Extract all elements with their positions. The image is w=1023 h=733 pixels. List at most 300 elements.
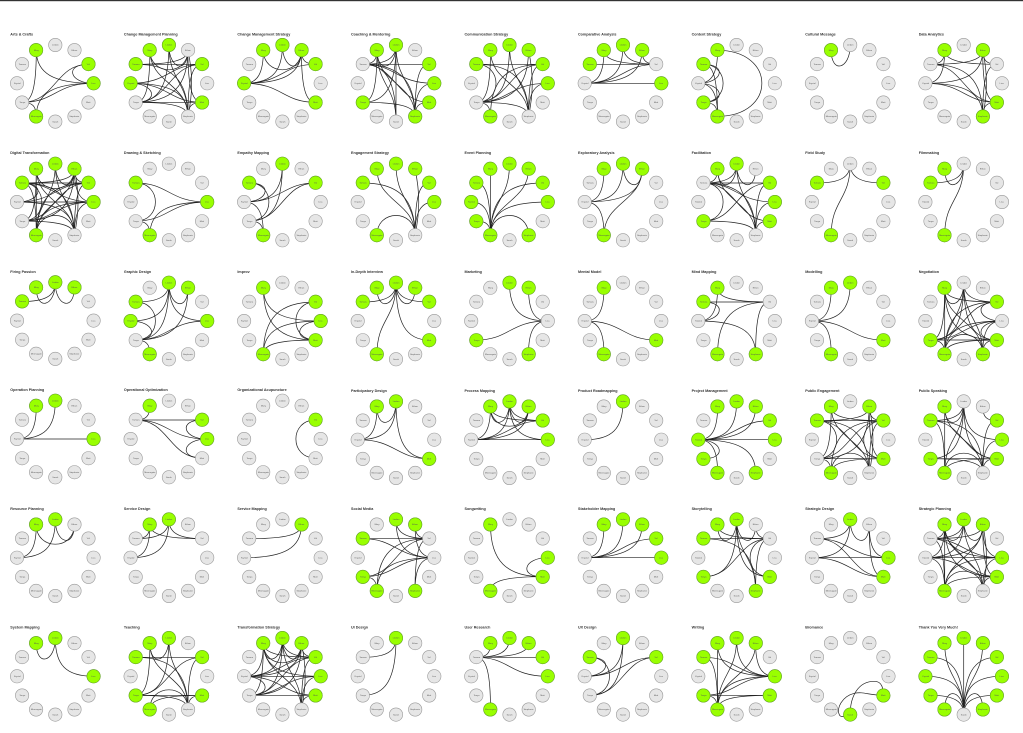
nodes: Lisa (318, 439, 323, 441)
nodes: Lindon (52, 519, 59, 521)
nodes: Tamara (473, 419, 481, 422)
nodes: Krystal (355, 82, 362, 85)
nodes: Stephanie (864, 590, 875, 593)
nodes: Tonya (814, 695, 821, 697)
nodes: Sarah (507, 713, 513, 716)
nodes: Tamara (814, 182, 822, 184)
nodes: Mary (147, 642, 153, 645)
nodes: Mary (375, 642, 380, 645)
nodes: Krystal (809, 201, 816, 204)
nodes: Krystal (922, 82, 930, 85)
panel: Engagement Strategy (351, 151, 441, 247)
edges (926, 520, 1002, 591)
nodes: Ethan (980, 286, 986, 290)
nodes (692, 395, 782, 485)
nodes: Ethan (299, 168, 305, 170)
nodes: Meenugate (31, 590, 43, 593)
nodes: Lisa (773, 557, 777, 559)
title: Participatory Design (351, 389, 388, 393)
nodes: Ethan (185, 404, 192, 408)
nodes: Lisa (1000, 676, 1004, 678)
nodes: Krystal (241, 320, 248, 323)
nodes: Lisa (545, 676, 550, 678)
nodes (692, 157, 782, 247)
nodes: Sarah (279, 595, 286, 598)
nodes: Meenugate (712, 353, 724, 356)
nodes: Lindon (506, 638, 514, 640)
panel: Transformation Strategy (237, 626, 327, 721)
nodes: Sarah (961, 358, 967, 361)
edges (931, 283, 1002, 354)
title: Service Design (124, 507, 151, 511)
nodes: Val (654, 420, 658, 422)
nodes: Lisa (432, 321, 437, 323)
nodes: Tamara (132, 537, 140, 540)
nodes: Sarah (279, 476, 286, 479)
edges (817, 164, 883, 235)
nodes: Tonya (701, 459, 707, 461)
nodes: Krystal (922, 201, 930, 204)
nodes: Stephanie (637, 472, 648, 475)
nodes: Ethan (866, 523, 873, 526)
nodes: Val (882, 420, 885, 422)
nodes (124, 157, 214, 247)
nodes: Ethan (299, 49, 305, 52)
nodes: Tonya (701, 102, 707, 104)
nodes: Krystal (14, 556, 21, 559)
nodes: Val (428, 64, 431, 66)
nodes: Stephanie (69, 234, 80, 237)
nodes: Krystal (128, 82, 135, 85)
nodes: Lindon (960, 45, 968, 47)
nodes: Lindon (620, 45, 627, 47)
nodes: Sarah (507, 120, 513, 123)
title: Operation Planning (10, 388, 44, 392)
title: Process Mapping (464, 389, 495, 393)
nodes: Krystal (468, 556, 475, 559)
title: User Research (464, 625, 491, 629)
nodes: Matt (427, 576, 432, 579)
nodes: Ethan (980, 642, 986, 645)
nodes: Krystal (809, 556, 816, 559)
nodes: Tonya (133, 102, 140, 104)
title: Field Study (805, 151, 826, 155)
nodes: Ethan (526, 405, 532, 408)
nodes: Matt (86, 339, 91, 342)
nodes: Val (541, 420, 545, 422)
panel: Change Management Strategy (237, 33, 327, 128)
nodes: Mary (147, 49, 153, 52)
nodes: Lindon (847, 638, 854, 640)
nodes: Tonya (246, 458, 253, 460)
nodes: Lisa (318, 83, 323, 85)
nodes: Tamara (246, 300, 254, 304)
nodes: Ethan (412, 523, 419, 526)
nodes: Ethan (753, 168, 759, 170)
nodes: Tonya (928, 221, 934, 223)
nodes: Val (428, 657, 431, 659)
edges (699, 288, 770, 354)
nodes (805, 631, 895, 721)
nodes: Stephanie (751, 472, 761, 475)
nodes: Krystal (128, 556, 135, 559)
nodes: Mary (488, 642, 494, 645)
nodes: Tamara (586, 537, 594, 540)
nodes: Mary (261, 168, 267, 170)
nodes: Meenugate (144, 353, 156, 356)
nodes: Val (654, 538, 658, 540)
nodes: Meenugate (31, 115, 43, 118)
nodes: Sarah (734, 595, 740, 598)
panel: Arts & Crafts (10, 33, 100, 128)
nodes: Mary (147, 286, 153, 290)
edges (472, 164, 548, 235)
nodes: Lindon (733, 282, 741, 284)
nodes: Lisa (659, 83, 664, 85)
nodes: Krystal (582, 201, 589, 204)
panel: Graphic Design (124, 270, 214, 366)
nodes: Matt (654, 339, 659, 342)
panel: Participatory Design (351, 389, 441, 485)
nodes: Tonya (133, 221, 140, 223)
nodes: Tamara (927, 63, 935, 66)
nodes: Meenugate (826, 472, 837, 475)
nodes: Tamara (132, 300, 140, 304)
nodes: Matt (881, 694, 886, 697)
nodes: Tonya (474, 577, 480, 579)
nodes: Matt (767, 220, 772, 223)
nodes: Lisa (205, 83, 210, 85)
title: Cultural Message (805, 33, 836, 37)
nodes: Matt (654, 458, 659, 461)
nodes (805, 276, 895, 366)
nodes: Lisa (886, 439, 891, 441)
nodes: Lisa (773, 83, 777, 85)
nodes: Sarah (52, 358, 59, 361)
nodes: Meenugate (258, 353, 270, 356)
nodes: Krystal (468, 675, 475, 678)
nodes: Lindon (279, 638, 286, 640)
nodes: Krystal (14, 201, 21, 204)
panel: Firing Passion (10, 270, 100, 366)
nodes: Mary (602, 49, 607, 52)
nodes: Val (87, 538, 90, 540)
nodes: Val (314, 64, 317, 66)
title: Transformation Strategy (237, 625, 281, 629)
title: Mind Mapping (692, 270, 716, 274)
nodes: Tonya (19, 577, 26, 579)
title: Comparative Analysis (578, 33, 616, 37)
nodes: Tonya (587, 577, 594, 579)
nodes: Lisa (91, 83, 96, 85)
nodes: Ethan (980, 523, 986, 526)
nodes: Val (200, 64, 204, 66)
nodes: Matt (540, 101, 545, 104)
nodes: Krystal (695, 201, 702, 204)
title: Arts & Crafts (10, 33, 33, 37)
nodes: Sarah (52, 713, 59, 716)
nodes: Ethan (639, 405, 646, 408)
nodes: Tamara (700, 656, 708, 659)
nodes: Lindon (393, 638, 400, 640)
edges (17, 520, 74, 558)
nodes: Lisa (659, 676, 664, 678)
panel: Mental Model (578, 270, 668, 366)
nodes (10, 157, 100, 247)
nodes: Mary (34, 523, 40, 526)
nodes: Mary (147, 404, 153, 408)
nodes (692, 513, 782, 603)
nodes: Lisa (205, 676, 210, 678)
nodes: Lindon (52, 45, 59, 47)
nodes: Meenugate (144, 115, 156, 118)
title: Exploratory Analysis (578, 151, 615, 155)
nodes: Tamara (132, 656, 140, 659)
nodes: Krystal (809, 675, 816, 678)
nodes: Mary (829, 405, 835, 408)
nodes: Lisa (659, 439, 664, 441)
panel: Content Strategy (692, 33, 782, 128)
nodes: Sarah (279, 358, 286, 361)
nodes: Val (995, 420, 999, 422)
nodes: Val (995, 302, 999, 304)
nodes: Val (541, 182, 545, 184)
nodes (10, 513, 100, 603)
title: Engagement Strategy (351, 151, 390, 155)
nodes: Matt (995, 339, 999, 342)
title: Improv (237, 270, 251, 274)
nodes: Matt (540, 694, 545, 697)
nodes: Matt (86, 576, 91, 579)
nodes (919, 38, 1009, 128)
panel: Drawing & Sketching (124, 151, 214, 247)
panel: Coaching & Mentoring (351, 33, 441, 128)
nodes: Mary (942, 49, 948, 52)
nodes: Lindon (393, 401, 400, 403)
nodes (351, 513, 441, 603)
nodes: Matt (540, 339, 545, 342)
nodes (237, 276, 327, 366)
nodes: Matt (313, 457, 318, 460)
nodes: Krystal (241, 675, 248, 678)
nodes: Mary (488, 286, 494, 290)
nodes: Meenugate (485, 234, 497, 237)
nodes: Stephanie (296, 115, 307, 118)
edges (585, 288, 656, 354)
nodes: Krystal (809, 82, 816, 85)
nodes: Tonya (19, 221, 26, 223)
edges (476, 638, 548, 709)
panel: Data Analytics (919, 33, 1009, 128)
nodes: Val (314, 420, 317, 422)
nodes: Val (541, 538, 545, 540)
nodes: Stephanie (751, 708, 761, 711)
nodes: Tamara (473, 182, 481, 184)
nodes: Tonya (360, 221, 367, 223)
nodes: Meenugate (372, 590, 383, 593)
nodes: Tamara (19, 656, 27, 659)
nodes: Stephanie (637, 590, 648, 593)
nodes: Meenugate (599, 115, 610, 118)
nodes (124, 38, 214, 128)
title: Thank You Very Much! (919, 625, 958, 629)
panel: User Research (464, 626, 554, 721)
nodes: Stephanie (864, 234, 875, 237)
nodes: Lindon (393, 163, 400, 165)
nodes: Val (882, 64, 885, 66)
nodes: Meenugate (258, 234, 270, 237)
edges (838, 681, 883, 717)
nodes: Meenugate (258, 708, 270, 711)
nodes: Krystal (582, 320, 589, 323)
nodes: Ethan (71, 286, 78, 289)
nodes: Mary (488, 168, 494, 170)
nodes: Matt (767, 339, 772, 342)
nodes: Stephanie (751, 115, 761, 118)
nodes: Mary (829, 168, 835, 170)
nodes: Sarah (620, 239, 627, 242)
nodes: Ethan (526, 168, 532, 170)
panel: Digital Transformation (10, 151, 100, 247)
nodes: Lisa (773, 321, 777, 323)
nodes: Lisa (886, 676, 891, 678)
edges (704, 638, 775, 709)
nodes: Matt (995, 694, 999, 697)
nodes: Meenugate (485, 708, 497, 711)
nodes (919, 276, 1009, 366)
panel: Public Engagement (805, 389, 895, 485)
nodes: Krystal (241, 556, 248, 559)
panel: Service Mapping (237, 507, 327, 603)
nodes: Lindon (52, 282, 59, 284)
nodes: Matt (654, 576, 659, 579)
nodes: Lisa (1000, 557, 1004, 559)
nodes: Matt (86, 457, 91, 460)
nodes: Stephanie (637, 234, 648, 237)
nodes: Ethan (185, 49, 192, 52)
nodes: Ethan (753, 642, 759, 645)
nodes: Lisa (91, 202, 96, 204)
nodes: Stephanie (978, 353, 988, 356)
nodes: Val (87, 182, 90, 184)
panel: Comparative Analysis (578, 33, 668, 128)
nodes: Lisa (545, 321, 550, 323)
title: Writing (692, 625, 704, 629)
nodes: Ethan (185, 168, 192, 170)
nodes: Val (768, 182, 772, 184)
nodes: Lindon (847, 45, 854, 47)
top border bar (0, 0, 1023, 1)
nodes: Ethan (71, 642, 78, 645)
nodes: Meenugate (712, 590, 724, 593)
nodes: Matt (86, 220, 91, 223)
edges (136, 638, 202, 709)
nodes: Krystal (695, 438, 702, 441)
nodes: Matt (654, 694, 659, 697)
nodes: Val (428, 538, 431, 540)
nodes: Ethan (639, 523, 646, 526)
nodes: Ethan (185, 642, 192, 645)
nodes: Tonya (814, 221, 821, 223)
title: Mental Model (578, 270, 601, 274)
nodes: Val (995, 657, 999, 659)
panel: Resource Planning (10, 507, 100, 603)
nodes: Val (200, 302, 204, 304)
panel: Modelling (805, 270, 895, 366)
nodes: Mary (147, 523, 153, 526)
nodes: Tamara (927, 537, 935, 540)
nodes: Sarah (279, 713, 286, 716)
nodes: Val (882, 657, 885, 659)
nodes: Matt (313, 576, 318, 579)
nodes: Val (995, 64, 999, 66)
nodes: Mary (602, 642, 607, 645)
nodes: Sarah (166, 239, 173, 242)
nodes: Lindon (960, 163, 968, 165)
nodes: Meenugate (258, 590, 270, 593)
nodes: Sarah (620, 477, 627, 480)
nodes: Lindon (166, 519, 173, 521)
nodes: Stephanie (296, 471, 307, 474)
nodes (237, 394, 327, 484)
edges (263, 288, 320, 354)
nodes: Mary (375, 405, 380, 408)
nodes: Krystal (695, 82, 702, 85)
nodes: Stephanie (183, 471, 194, 474)
nodes: Meenugate (372, 472, 383, 475)
nodes: Ethan (639, 286, 646, 290)
panel: UX Design (578, 626, 668, 721)
nodes: Matt (313, 694, 318, 697)
panel: Songwriting (464, 507, 554, 603)
nodes: Lindon (166, 400, 173, 402)
nodes: Tamara (19, 418, 27, 422)
nodes: Tamara (359, 300, 367, 304)
nodes: Stephanie (296, 590, 307, 593)
nodes: Val (428, 420, 431, 422)
nodes: Krystal (809, 320, 816, 323)
nodes: Krystal (128, 201, 135, 204)
nodes: Tamara (473, 63, 481, 66)
nodes: Tamara (132, 63, 140, 66)
title: Change Management Strategy (237, 33, 291, 37)
nodes (124, 394, 214, 484)
panel: Facilitation (692, 151, 782, 247)
nodes: Tamara (814, 537, 822, 540)
nodes: Meenugate (826, 234, 837, 237)
nodes (464, 513, 554, 603)
edges (244, 164, 315, 235)
title: Graphic Design (124, 270, 152, 274)
nodes: Mary (488, 49, 494, 52)
title: Filmmaking (919, 151, 939, 155)
panel: Project Management (692, 389, 782, 485)
nodes: Matt (313, 220, 318, 223)
nodes: Lisa (91, 676, 96, 678)
nodes: Tamara (19, 182, 27, 184)
nodes: Tamara (586, 300, 594, 304)
nodes: Tamara (19, 537, 27, 540)
nodes: Krystal (582, 675, 589, 678)
nodes: Lisa (1000, 83, 1004, 85)
nodes: Val (541, 657, 545, 659)
nodes: Matt (881, 339, 886, 342)
title: System Mapping (10, 625, 40, 629)
edges (490, 525, 548, 591)
nodes (124, 631, 214, 721)
nodes: Stephanie (410, 590, 421, 593)
nodes: Lisa (659, 321, 664, 323)
